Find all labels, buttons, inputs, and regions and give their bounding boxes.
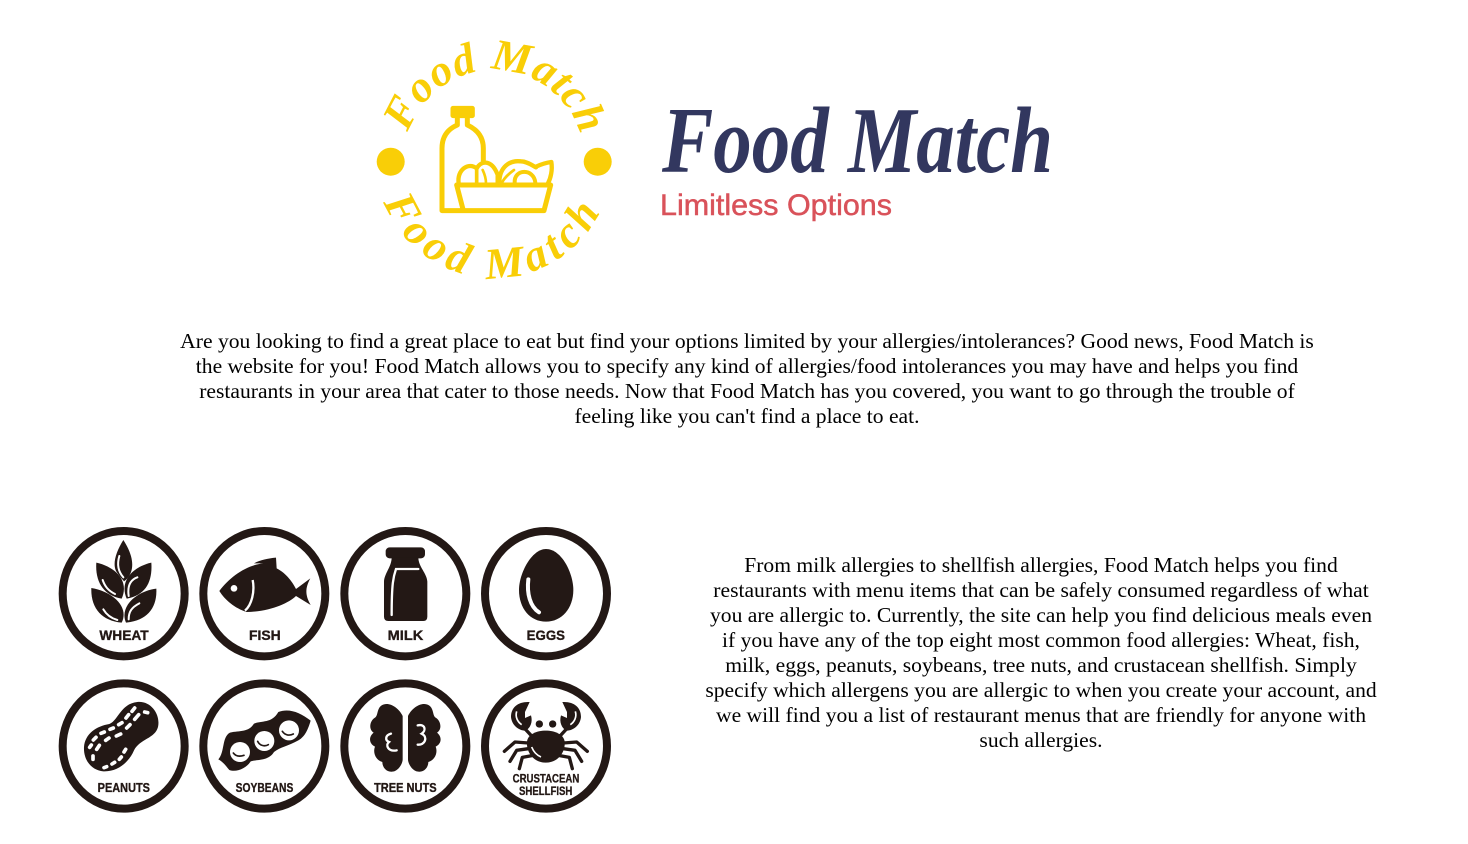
left dot xyxy=(377,148,405,176)
allergen description paragraph: milk, eggs, peanuts, soybeans, tree nuts, and crustacean shellfish. Simply xyxy=(725,653,1357,677)
intro paragraph: feeling like you can't find a place to eat. xyxy=(574,404,920,428)
label: WHEAT: WHEAT xyxy=(99,628,149,643)
logo: circular food match badge xyxy=(376,40,612,280)
label: SOYBEANS: SOYBEANS xyxy=(236,781,293,795)
allergen icon: soybeans xyxy=(203,683,325,809)
tagline: Limitless Options: Limitless Options xyxy=(660,189,892,222)
allergen icon: crustacean shellfish xyxy=(485,683,607,809)
allergen icon: fish xyxy=(203,531,325,656)
label: PEANUTS: PEANUTS xyxy=(98,781,150,795)
intro paragraph: the website for you! Food Match allows you to specify any kind of allergies/food intolerances you may have and helps you find xyxy=(196,354,1298,378)
allergen description paragraph: such allergies. xyxy=(979,728,1103,752)
intro paragraph: restaurants in your area that cater to those needs. Now that Food Match has you covered, you want to go through the trouble of xyxy=(199,379,1295,403)
intro paragraph xyxy=(180,329,1314,428)
wordmark: Food Match: Food Match xyxy=(661,89,1053,193)
allergen description paragraph xyxy=(705,553,1377,752)
label: EGGS: EGGS xyxy=(527,628,565,643)
allergen icon: wheat xyxy=(63,531,185,656)
allergen description paragraph: restaurants with menu items that can be safely consumed regardless of what xyxy=(713,578,1369,602)
allergen description paragraph: specify which allergens you are allergic to when you create your account, and xyxy=(705,678,1377,702)
label: CRUSTACEAN SHELLFISH xyxy=(513,771,579,798)
allergen description paragraph: if you have any of the top eight most common food allergies: Wheat, fish, xyxy=(722,628,1360,652)
label: CRUSTACEAN SHELLFISH: CRUSTACEAN xyxy=(513,771,579,785)
label: FISH: FISH xyxy=(249,628,281,643)
allergen description paragraph: you are allergic to. Currently, the site can help you find delicious meals even xyxy=(710,603,1372,627)
allergen description paragraph: From milk allergies to shellfish allergies, Food Match helps you find xyxy=(744,553,1338,577)
label: TREE NUTS: TREE NUTS xyxy=(374,781,437,795)
circular text: bottom arc: Food Match xyxy=(383,193,600,280)
circular text: top arc: Food Match xyxy=(384,40,604,132)
right dot xyxy=(584,148,612,176)
allergen icon: tree nuts xyxy=(344,683,466,809)
icon: bottle and basket xyxy=(442,108,552,211)
label: MILK: MILK xyxy=(388,628,423,643)
allergen icon: eggs xyxy=(485,531,607,656)
allergen icon: peanuts xyxy=(63,683,185,809)
allergen icon: milk xyxy=(344,531,466,656)
intro paragraph: Are you looking to find a great place to eat but find your options limited by your allergies/intolerances? Good news, Food Match is xyxy=(180,329,1314,353)
label: CRUSTACEAN SHELLFISH: SHELLFISH xyxy=(519,784,572,798)
allergen description paragraph: we will find you a list of restaurant menus that are friendly for anyone with xyxy=(716,703,1366,727)
